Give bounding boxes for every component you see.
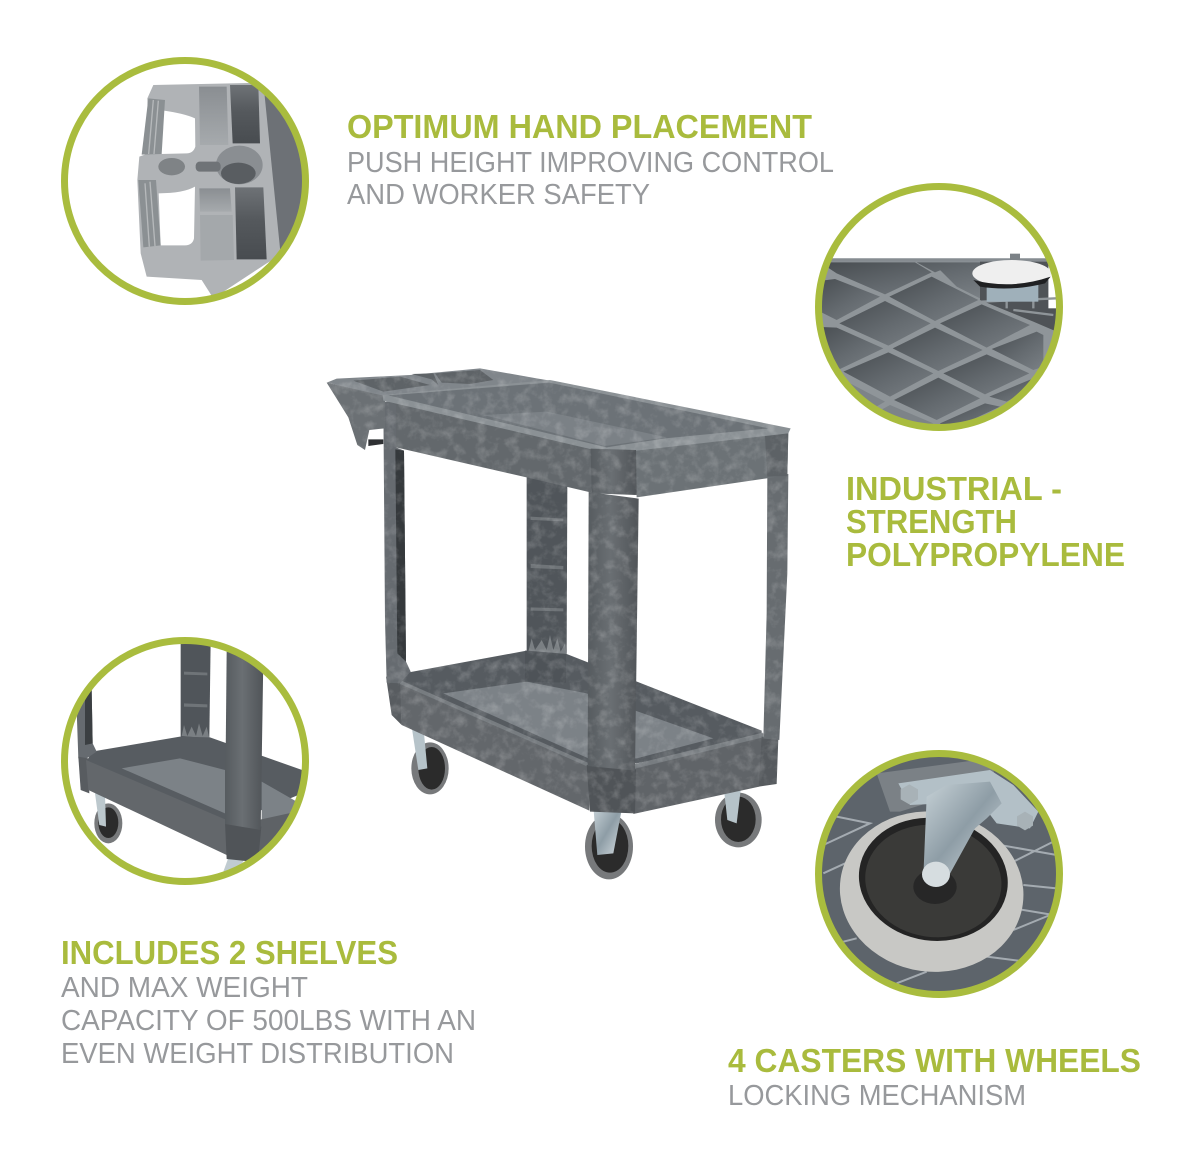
left upright <box>383 402 411 683</box>
text: locking mechanism: LOCKING MECHANISM <box>728 1080 1026 1112</box>
text: push height: PUSH HEIGHT IMPROVING CONTROL <box>347 147 834 179</box>
callout: casters with wheels <box>728 748 1141 1112</box>
text: max weight: AND MAX WEIGHT <box>61 972 308 1004</box>
heading: includes 2 shelves: INCLUDES 2 SHELVES <box>61 934 398 971</box>
slot in left upright <box>395 449 406 662</box>
right upright <box>763 474 788 740</box>
text: push height: AND WORKER SAFETY <box>347 179 650 211</box>
front post <box>588 492 639 771</box>
heading: industrial strength polypropylene: STRENGTH <box>846 503 1017 540</box>
main product: two-shelf utility cart <box>327 368 791 879</box>
top shelf <box>383 380 791 497</box>
ring: underside detail <box>818 186 1060 428</box>
heading: industrial strength polypropylene: POLYPROPYLENE <box>846 536 1125 573</box>
ring: handle detail <box>64 60 306 302</box>
back upright <box>527 475 567 655</box>
heading: industrial strength polypropylene <box>846 470 1125 573</box>
text: push height <box>347 147 834 211</box>
cart wheels <box>411 727 762 879</box>
detail image: caster wheel <box>822 757 1056 991</box>
text: max weight <box>61 972 476 1070</box>
callout: optimum hand placement <box>64 60 834 302</box>
handle <box>327 368 550 450</box>
detail image: handle tray <box>137 83 317 298</box>
heading: optimum hand placement: OPTIMUM HAND PLACEMENT <box>347 108 812 145</box>
text: max weight: CAPACITY OF 500LBS WITH AN <box>61 1005 476 1037</box>
ring: caster detail <box>818 754 1060 994</box>
callout: includes 2 shelves <box>61 640 476 1070</box>
heading: industrial strength polypropylene: INDUSTRIAL - <box>846 470 1062 507</box>
heading: 4 casters with wheels: 4 CASTERS WITH WHEELS <box>728 1042 1141 1079</box>
lower shelf <box>386 651 778 814</box>
cart body <box>327 368 791 814</box>
detail image: lower shelf <box>77 640 307 873</box>
callout: industrial strength polypropylene <box>813 186 1125 573</box>
text: max weight: EVEN WEIGHT DISTRIBUTION <box>61 1038 454 1070</box>
ring: shelf detail <box>64 640 306 882</box>
handle bracket <box>368 439 383 446</box>
detail image: diamond ribbed underside <box>813 254 1057 435</box>
